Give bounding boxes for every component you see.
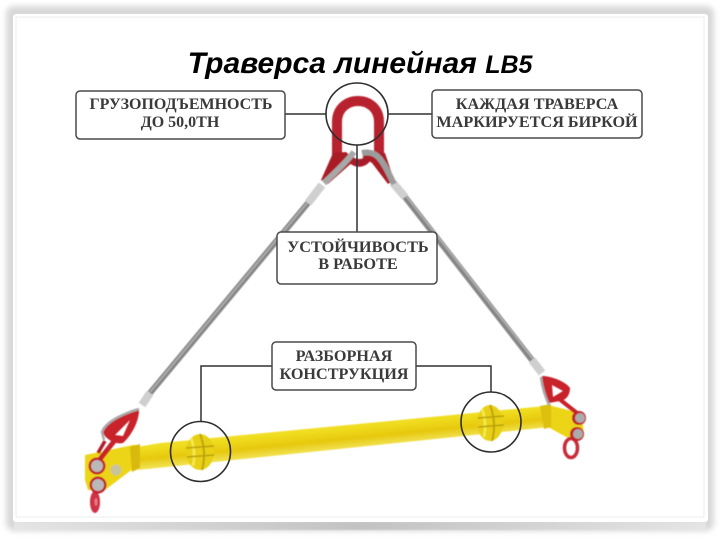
callout: collapsible design (272, 342, 416, 390)
callout: marking tag: МАРКИРУЕТСЯ БИРКОЙ (436, 112, 638, 131)
callout: load capacity: ДО 50,0ТН (141, 114, 220, 131)
title: Траверса линейная LB5 (188, 47, 534, 80)
top red master link (337, 101, 379, 167)
highlight circle: right coupling (461, 392, 521, 452)
left red thimble (103, 410, 139, 443)
callout: collapsible design: РАЗБОРНАЯ (296, 347, 393, 365)
left wire rope (142, 185, 322, 405)
right thimble grey edge (541, 377, 549, 405)
yellow beam (137, 406, 550, 470)
right coupling (477, 405, 504, 441)
callout: marking tag (432, 90, 642, 138)
left thimble grey edge (102, 409, 139, 440)
right end plate (540, 398, 586, 458)
left end plate (85, 440, 140, 513)
lifting sling illustration (85, 101, 586, 513)
highlight circle: top link (326, 83, 388, 145)
right wire rope (393, 183, 542, 373)
highlight circle: left coupling (170, 422, 230, 482)
left coupling (186, 434, 214, 470)
left sling eye (321, 152, 355, 184)
callout: load capacity (76, 91, 285, 139)
callout: stability (277, 232, 437, 284)
right sling eye (362, 151, 394, 184)
callout: marking tag: КАЖДАЯ ТРАВЕРСА (456, 95, 619, 113)
callout connector lines (201, 114, 491, 421)
callout: stability: УСТОЙЧИВОСТЬ (287, 237, 429, 256)
callout: load capacity: ГРУЗОПОДЪЕМНОСТЬ (90, 96, 272, 113)
right red thimble (542, 376, 570, 403)
callout: collapsible design: КОНСТРУКЦИЯ (280, 365, 409, 383)
callout: stability: В РАБОТЕ (318, 254, 398, 273)
